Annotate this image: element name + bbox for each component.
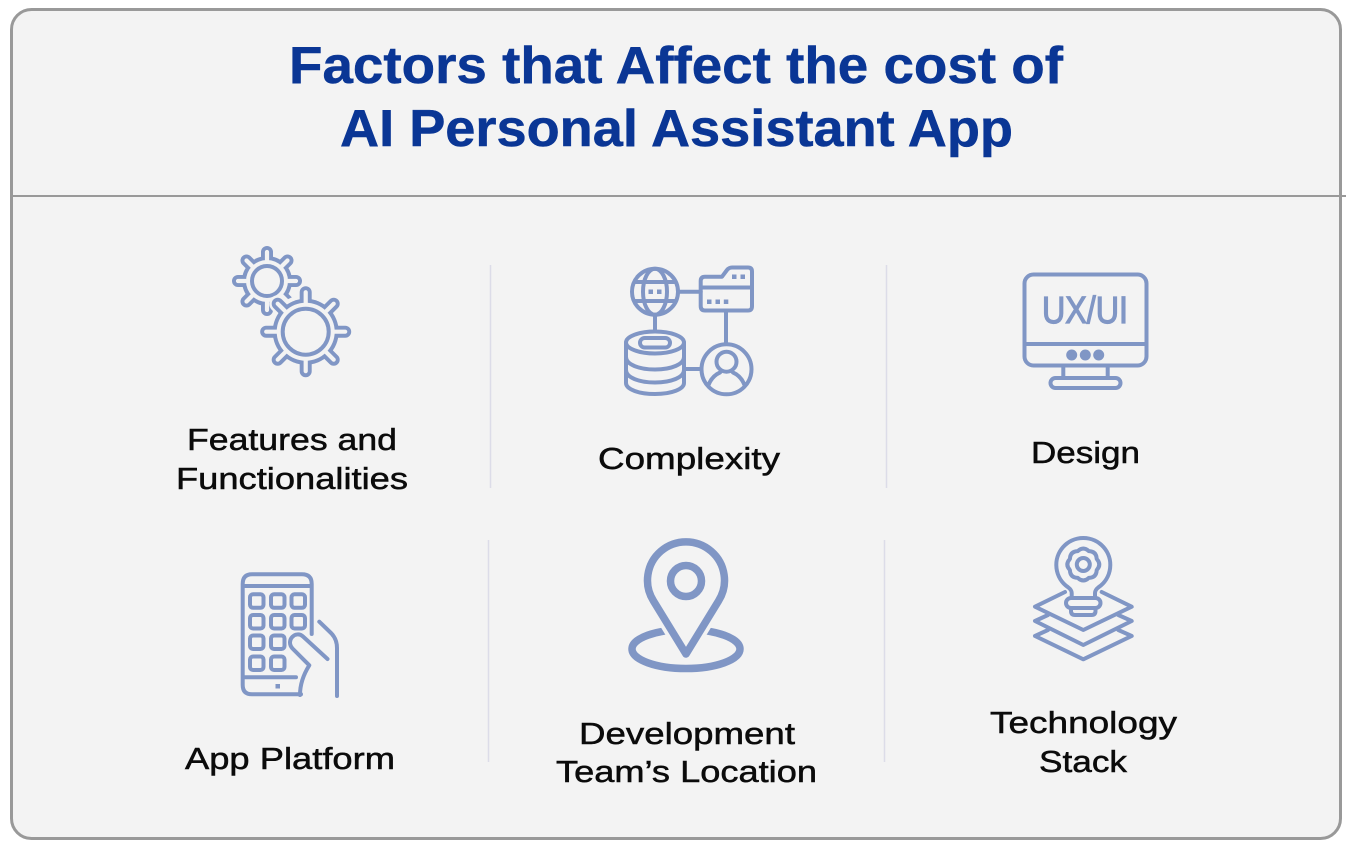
label: Technology Stack: Technology [990,705,1178,740]
title [289,37,1064,158]
icon: gears [238,252,345,371]
icon: UX/UI monitor: UX/UI [1042,290,1128,332]
title: AI Personal Assistant App [340,100,1013,158]
label: Development Team's Location: Development [579,716,795,751]
label: Features and Functionalities: Features and [187,422,397,457]
title: Factors that Affect the cost of [289,37,1064,95]
icon: UX/UI monitor [1024,274,1146,388]
icon: light bulb on layers [1035,538,1132,659]
label: Technology Stack: Stack [1039,744,1128,779]
label: App Platform: App Platform [185,741,395,776]
label: Development Team's Location [556,716,817,789]
label: Features and Functionalities: Functionalities [176,461,408,496]
label: Design: Design [1031,435,1140,470]
icon: hand holding phone [243,574,337,696]
label: Features and Functionalities [176,422,408,496]
label: Complexity: Complexity [598,441,781,476]
label: Technology Stack [990,705,1178,779]
icon: location pin [632,542,740,668]
icon: network of globe, folder, database and user [626,268,752,394]
label: Development Team's Location: Team’s Location [556,754,817,789]
